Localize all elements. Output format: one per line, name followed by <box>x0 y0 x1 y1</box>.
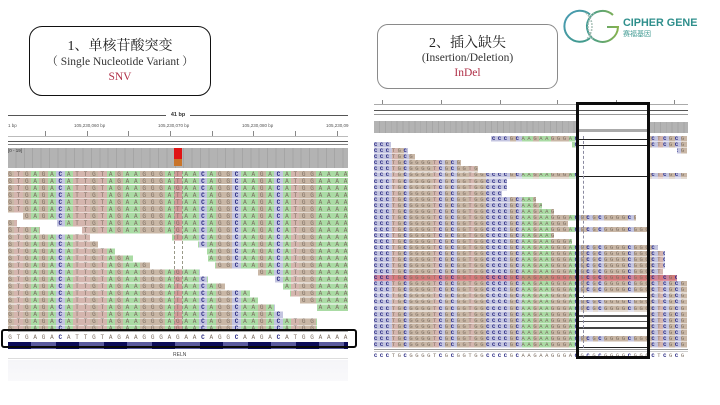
amino acid bar <box>8 342 348 348</box>
panel: InDel aligned reads <box>374 136 687 348</box>
label: genome position 5: 105,230,09 <box>326 123 349 128</box>
deletion lines inside highlight <box>579 139 647 348</box>
coverage track: deletion dip <box>577 129 649 132</box>
text: SNV English: （ Single Nucleotide Variant ） <box>46 56 194 68</box>
mismatched read highlighted red <box>374 275 688 281</box>
label: genome position 2: 105,230,060 bp <box>74 123 105 128</box>
base colour columns <box>8 171 348 329</box>
highlight box: InDel deletion region <box>576 102 650 359</box>
read letters: TG GGGGT G GGTGG G AAGAAGGGA G G GGGG GGG T G G TG GGGGT G GGTGG G AAGAAGGGA G G GGGG GGG T G G TG GGGGT G GGTGG G AAGAAGGGA G G GGGG GGG T G G TG GGGGT G GGTGG G AAGAAGGGA G G GGGG GGG T G G TG GGGGT G GGTGG G AAGAAGGGA G G GGGG GGG T G G TG GGGGT G GGTGG G AAGAAGGGA G G GGGG GGG T G G TG GGGGT G GGTGG G AAGAAGGGA G G GGGG GGG T G G TG GGGGT G GGTGG G AAGAAGGGA G G GGGG GGG T G G TG GGGGT G GGTGG G AAGAAGGGA G G GGGG GGG T G G TG GGGGT G GGTGG G AAGAAGGGA G G GGGG GGG T G G TG GGGGT G GGTGG G AAGAAGGGA G G GGGG GGG T G G TG GGGGT G GGTGG G AAGAAGGGA G G GGGG GGG T G G TG GGGGT G GGTGG G AAGAAGGGA G G GGGG GGG T G G TG GGGGT G GGTGG G AAGAAGGGA G G GGGG GGG T G G TG GGGGT G GGTGG G AAGAAGGGA G G GGGG GGG T G G TG GGGGT G GGTGG G AAGAAGGGA G G GGGG GGG T G G TG GGGGT G GGTGG G AAGAAGGGA G G GGGG GGG T G G TG GGGGT G GGTGG G AAGAAGGGA G G GGGG GGG T G G TG GGGGT G GGTGG G AAGAAGGGA G G GGGG GGG T G G TG GGGGT G GGTGG G AAGAAGGGA G G GGGG GGG T G G TG GGGGT G GGTGG G AAGAAGGGA G G GGGG GGG T G G TG GGGGT G GGTGG G AAGAAGGGA G G GGGG GGG T G G TG GGGGT G GGTGG G AAGAAGGGA G G GGGG GGG T G G TG GGGGT G GGTGG G AAGAAGGGA G G GGGG GGG T G G TG GGGGT G GGTGG G AAGAAGGGA G G GGGG GGG T G G TG GGGGT G GGTGG G AAGAAGGGA G G GGGG GGG T G G TG GGGGT G GGTGG G AAGAAGGGA G G GGGG GGG T G G TG GGGGT G GGTGG G AAGAAGGGA G G GGGG GGG T G G TG GGGGT G GGTGG G AAGAAGGGA G G GGGG GGG T G G TG GGGGT G GGTGG G AAGAAGGGA G G GGGG GGG T G G TG GGGGT G GGTGG G AAGAAGGGA G G GGGG GGG T G G TG GGGGT G GGTGG G AAGAAGGGA G G GGGG GGG T G G TG GGGGT G GGTGG G AAGAAGGGA G G GGGG GGG T G G TG GGGGT G GGTGG G AAGAAGGGA G G GGGG GGG T G G TG GGGGT G GGTGG G AAGAAGGGA G G GGGG GGG T G G <box>374 136 687 348</box>
reference letters: cytosine: C C C C <box>59 334 285 341</box>
panel: SNV aligned reads <box>8 170 348 329</box>
coverage track <box>374 121 577 133</box>
label: genome position 1: 1 bp <box>8 123 17 128</box>
white gaps where reads end <box>374 136 688 347</box>
panel: SNV IGV header track <box>8 112 349 168</box>
panel: InDel reference sequence <box>374 349 688 359</box>
variant marker red <box>174 148 182 159</box>
callout: InDel title box <box>377 24 558 89</box>
reference letters: GTGAGA ATTGTAGAAGGGAGAA AGG AAGA ATGGAAAA <box>8 334 352 341</box>
reference letters: TG GGGGT G GGTGG G AAGAAGGGA G G GGGG GGG T G G <box>392 352 687 359</box>
label: coverage range: [0 - 19] <box>8 148 22 153</box>
coverage track <box>8 148 348 168</box>
panel: SNV reference sequence and gene track <box>8 331 352 370</box>
heading: SNV Chinese: 1、单核苷酸突变 <box>68 39 172 54</box>
label: genome position 4: 105,230,080 bp <box>242 123 273 128</box>
ruler span line <box>8 115 348 116</box>
callout: SNV title box <box>29 26 211 96</box>
reference letters: cytosine: CCC C C C CCCC C C C C C C C C <box>374 352 681 359</box>
lower empty track <box>8 360 348 381</box>
label: genome position 3: 105,230,070 bp <box>158 123 189 128</box>
text: InDel abbreviation: InDel <box>454 67 481 79</box>
label: span length: 41 bp <box>171 112 185 118</box>
variant marker orange <box>174 159 182 166</box>
label: gene name: RELN <box>173 352 186 358</box>
text: InDel English: (Insertion/Deletion) <box>422 52 513 64</box>
panel: InDel IGV header track <box>374 100 688 133</box>
variant position dashed guides <box>174 170 182 328</box>
heading: InDel Chinese: 2、插入缺失 <box>429 36 506 51</box>
text: company name: CIPHER GENE <box>623 17 697 29</box>
label: span length <box>166 112 190 119</box>
coverage track: right side <box>649 122 688 133</box>
dashed position guide <box>583 136 584 348</box>
logo: Cipher Gene <box>563 10 698 43</box>
soft-clip gaps between reads <box>8 213 348 329</box>
highlight box: SNV reference row <box>1 329 357 348</box>
base colour columns <box>374 136 687 348</box>
text: SNV abbreviation: SNV <box>108 71 132 83</box>
text: company Chinese name: 赛福基因 <box>623 31 651 38</box>
icon: interlocked C and G with DNA helix <box>563 10 620 43</box>
read letters: cytosine: CCC C C C CCCC C C C C C C C C CCC C C C CCCC C C C C C C C C CCC C C C CCCC C C C C C C C C CCC C C C CCCC C C C C C C C C CCC C C C CCCC C C C C C C C C CCC C C C CCCC C C C C C C C C CCC C C C CCCC C C C C C C C C CCC C C C CCCC C C C C C C C C CCC C C C CCCC C C C C C C C C CCC C C C CCCC C C C C C C C C CCC C C C CCCC C C C C C C C C CCC C C C CCCC C C C C C C C C CCC C C C CCCC C C C C C C C C CCC C C C CCCC C C C C C C C C CCC C C C CCCC C C C C C C C C CCC C C C CCCC C C C C C C C C CCC C C C CCCC C C C C C C C C CCC C C C CCCC C C C C C C C C CCC C C C CCCC C C C C C C C C CCC C C C CCCC C C C C C C C C CCC C C C CCCC C C C C C C C C CCC C C C CCCC C C C C C C C C CCC C C C CCCC C C C C C C C C CCC C C C CCCC C C C C C C C C CCC C C C CCCC C C C C C C C C CCC C C C CCCC C C C C C C C C CCC C C C CCCC C C C C C C C C CCC C C C CCCC C C C C C C C C CCC C C C CCCC C C C C C C C C CCC C C C CCCC C C C C C C C C CCC C C C CCCC C C C C C C C C CCC C C C CCCC C C C C C C C C CCC C C C CCCC C C C C C C C C CCC C C C CCCC C C C C C C C C CCC C C C CCCC C C C C C C C C <box>374 136 687 348</box>
